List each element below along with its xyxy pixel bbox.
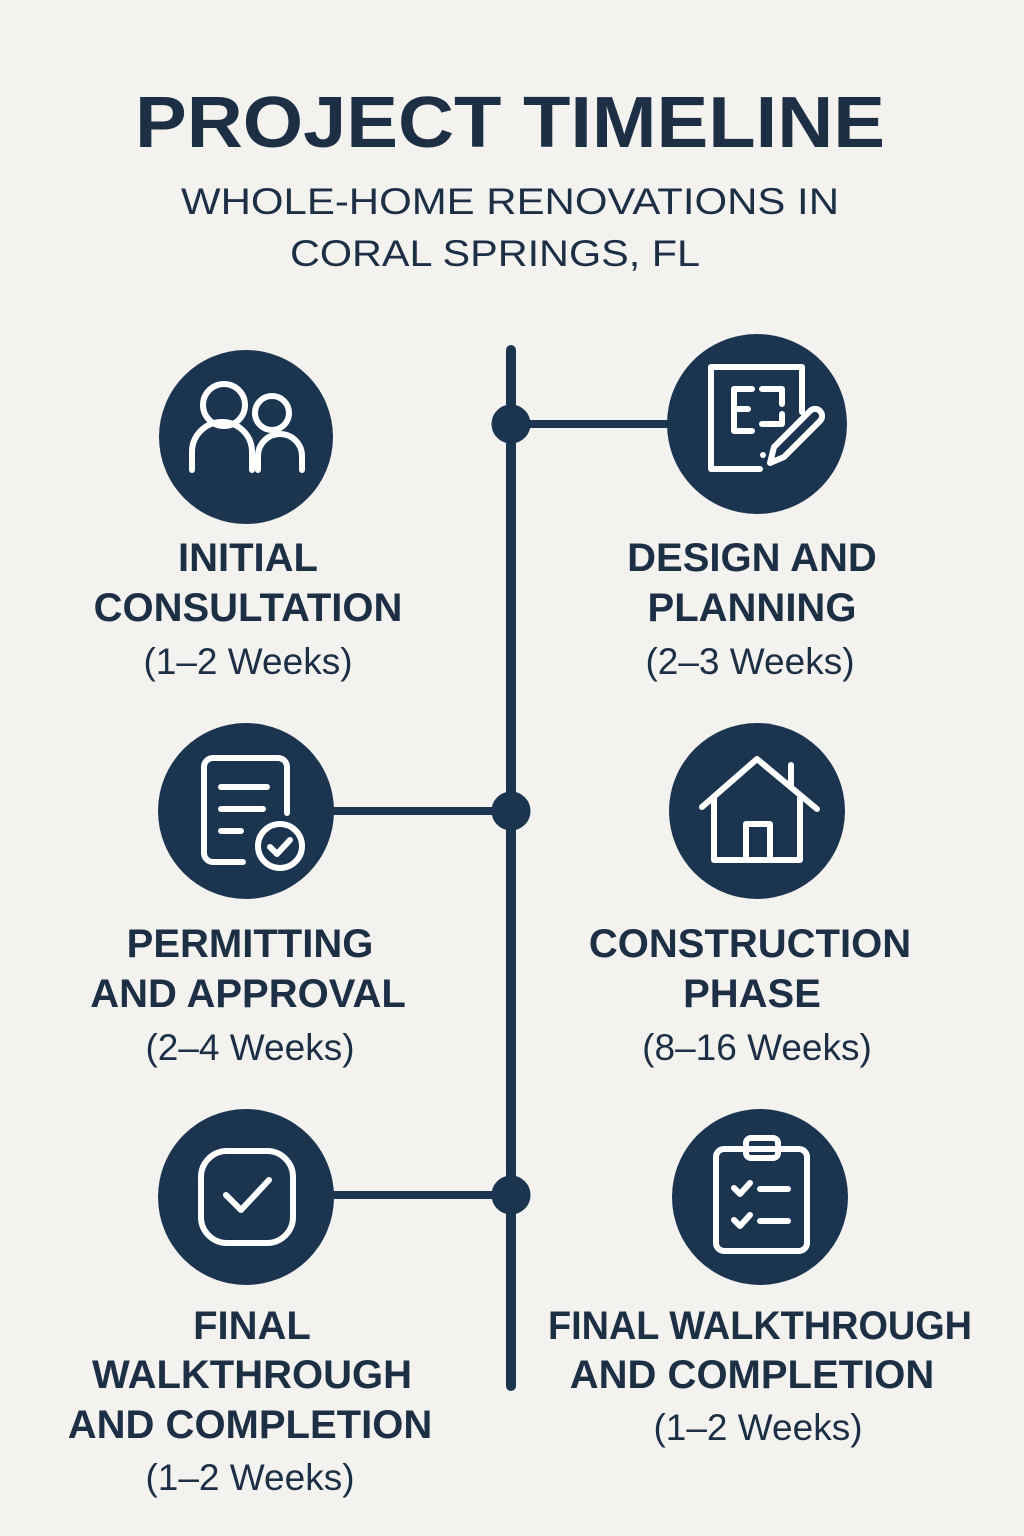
step 3: permitting: [90, 723, 406, 1068]
step 1: initial consultation: [94, 350, 402, 682]
step 5: final walkthrough: [68, 1109, 432, 1498]
step 2: design and planning: [627, 334, 877, 682]
subtitle: CORAL SPRINGS, FL: [290, 233, 700, 274]
step 4: construction: [589, 723, 911, 1068]
subtitle: WHOLE-HOME RENOVATIONS IN: [181, 181, 839, 222]
icon: clipboard: [672, 1109, 848, 1285]
step 6: final walkthrough and completion: [548, 1109, 972, 1448]
step 1: initial consultation: (1–2 Weeks): [143, 641, 353, 682]
step 2: design and planning: PLANNING: [648, 586, 856, 630]
icon: plan with pencil: [667, 334, 847, 514]
step 6: final walkthrough and completion: AND COMPLETION: [570, 1353, 934, 1397]
icon: document with check: [158, 723, 334, 899]
subtitle: [181, 181, 839, 274]
title: PROJECT TIMELINE: [135, 83, 885, 163]
step 4: construction: (8–16 Weeks): [642, 1027, 872, 1068]
step 6: final walkthrough and completion: FINAL WALKTHROUGH: [548, 1304, 972, 1348]
step 3: permitting: (2–4 Weeks): [145, 1027, 355, 1068]
step 5: final walkthrough: AND COMPLETION: [68, 1403, 432, 1447]
step 4: construction: CONSTRUCTION: [589, 922, 911, 966]
step 3: permitting: PERMITTING: [127, 922, 373, 966]
icon: people: [159, 350, 333, 524]
step 1: initial consultation: CONSULTATION: [94, 586, 402, 630]
step 1: initial consultation: INITIAL: [178, 536, 318, 580]
step 5: final walkthrough: FINAL: [193, 1304, 311, 1348]
step 2: design and planning: DESIGN AND: [627, 536, 877, 580]
step 5: final walkthrough: WALKTHROUGH: [92, 1353, 412, 1397]
step 4: construction: PHASE: [683, 972, 821, 1016]
step 3: permitting: AND APPROVAL: [90, 972, 406, 1016]
icon: house: [669, 723, 845, 899]
step 6: final walkthrough and completion: (1–2 Weeks): [653, 1407, 863, 1448]
timeline line: [330, 350, 680, 1386]
step 2: design and planning: (2–3 Weeks): [645, 641, 855, 682]
icon: check square: [158, 1109, 334, 1285]
step 5: final walkthrough: (1–2 Weeks): [145, 1457, 355, 1498]
